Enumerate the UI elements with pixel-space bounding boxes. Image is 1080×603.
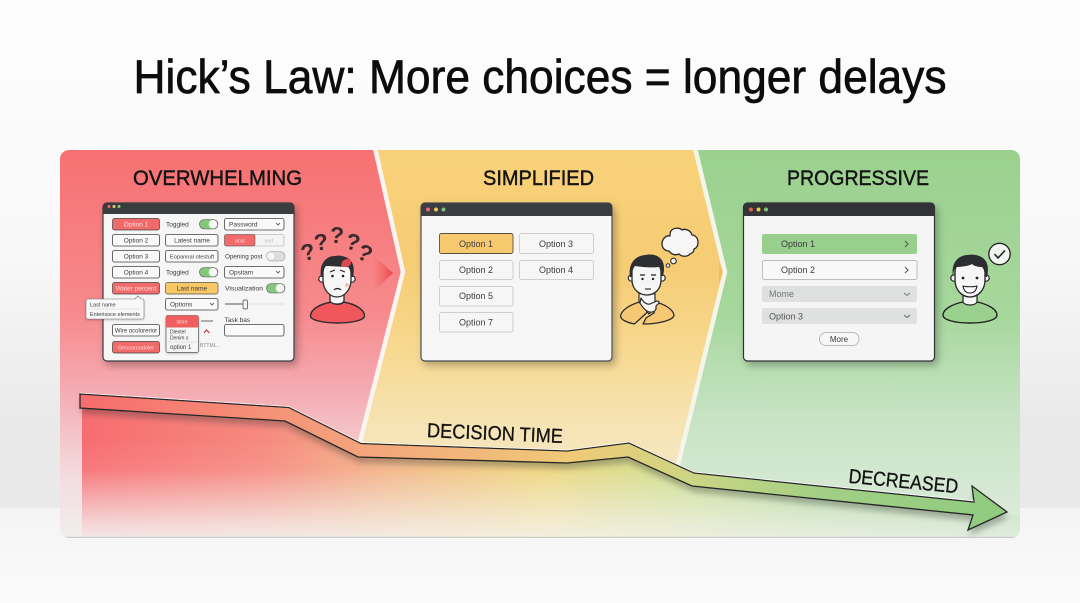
option buttons: Option 4 bbox=[539, 265, 573, 275]
middle column controls: BTTML.. bbox=[200, 343, 219, 349]
active option row bbox=[762, 234, 917, 254]
right column controls: Visualization bbox=[225, 286, 263, 292]
collapsed row: more: Mome bbox=[769, 289, 794, 299]
window: progressive interface bbox=[744, 203, 934, 361]
white divider one bbox=[360, 148, 403, 442]
panel: progressive zone bbox=[680, 150, 1020, 516]
panel: overwhelming zone bbox=[60, 150, 403, 538]
option buttons bbox=[440, 234, 594, 332]
right column controls bbox=[224, 218, 285, 336]
red dropdown menu: option 1 bbox=[170, 345, 192, 351]
left column options: Wire ocolorerior bbox=[115, 328, 157, 334]
red dropdown menu: Dlentel bbox=[170, 330, 186, 336]
heading: overwhelming: OVERWHELMING bbox=[133, 166, 302, 190]
option buttons: Option 7 bbox=[459, 318, 493, 328]
active option row: Option 1 bbox=[781, 239, 815, 249]
tooltip popup bbox=[86, 296, 144, 319]
floor bbox=[0, 508, 1080, 603]
arrow: decision time decreasing bbox=[80, 393, 1008, 536]
heading: progressive: PROGRESSIVE bbox=[787, 166, 929, 190]
label: decreased: DECREASED bbox=[848, 466, 959, 498]
middle column controls: Last name bbox=[177, 286, 208, 292]
orange chevron tip bbox=[719, 262, 722, 284]
option row two bbox=[762, 260, 917, 280]
right column controls: Opening post bbox=[225, 254, 263, 260]
middle column controls: Options bbox=[170, 302, 193, 308]
right column controls: Opsitam bbox=[229, 270, 253, 276]
middle column controls: Eopannal otestuft bbox=[170, 254, 215, 260]
selected option button bbox=[440, 234, 513, 254]
option buttons: Option 5 bbox=[459, 291, 493, 301]
middle column controls: Toggled bbox=[166, 270, 189, 276]
middle column controls: Latest name bbox=[174, 238, 210, 244]
icon: confused person with question marks bbox=[298, 222, 377, 323]
icon: confused person with question marks: ? bbox=[343, 228, 363, 256]
left column options bbox=[112, 218, 160, 353]
collapsed row: option 3: Option 3 bbox=[769, 312, 803, 322]
option buttons: Option 3 bbox=[539, 239, 573, 249]
window: simplified interface bbox=[421, 203, 612, 361]
heading: simplified: SIMPLIFIED bbox=[483, 166, 594, 190]
red chevron tip bbox=[376, 259, 393, 288]
icon: happy person with check mark bbox=[943, 243, 1010, 323]
icon: confused person with question marks: ? bbox=[329, 222, 345, 248]
left column options: Option 4 bbox=[124, 270, 149, 276]
tooltip popup: Last name bbox=[90, 302, 116, 308]
middle column controls: Toggled bbox=[166, 222, 189, 228]
icon: confused person with question marks: ? bbox=[353, 238, 377, 268]
option buttons: Option 2 bbox=[459, 265, 493, 275]
left column options: Water percent bbox=[116, 286, 156, 292]
panel: simplified zone bbox=[361, 150, 722, 464]
red dropdown menu: store bbox=[176, 320, 188, 326]
label: decision time: DECISION TIME bbox=[427, 420, 563, 448]
red dropdown menu: Denim s bbox=[170, 336, 189, 342]
more button bbox=[820, 332, 859, 346]
panel: three stage background bbox=[60, 148, 1020, 538]
left column options: Geocomodoler bbox=[118, 346, 154, 352]
red dropdown menu bbox=[166, 316, 198, 352]
pale base under decision time line bbox=[340, 479, 932, 537]
right column controls: Task bas bbox=[224, 317, 251, 324]
panel bottom edge bbox=[60, 537, 1020, 538]
white divider two bbox=[678, 148, 725, 465]
left column options: Option 3 bbox=[124, 254, 149, 260]
gradient area under decision time line bbox=[82, 400, 1020, 538]
middle column controls bbox=[166, 220, 219, 349]
icon: confused person with question marks: ? bbox=[298, 238, 318, 266]
left column options: Option 1 bbox=[124, 222, 149, 228]
icon: confused person with question marks: ? bbox=[312, 228, 330, 256]
collapsed row: option 3 bbox=[762, 308, 917, 324]
right column controls: post bbox=[235, 238, 245, 244]
left column options: Option 2 bbox=[124, 238, 149, 244]
icon: thinking person with thought bubble bbox=[620, 228, 698, 324]
right column controls: Password bbox=[229, 222, 258, 228]
more button: More bbox=[830, 335, 849, 344]
right column controls: text bbox=[265, 238, 274, 244]
tooltip popup: Enterisoce elements bbox=[90, 312, 140, 318]
option row two: Option 2 bbox=[781, 265, 815, 275]
title: Hick’s Law: More choices = longer delays bbox=[134, 50, 946, 103]
collapsed row: more bbox=[762, 286, 917, 302]
window: overwhelming interface bbox=[86, 203, 294, 361]
selected option button: Option 1 bbox=[459, 239, 493, 249]
